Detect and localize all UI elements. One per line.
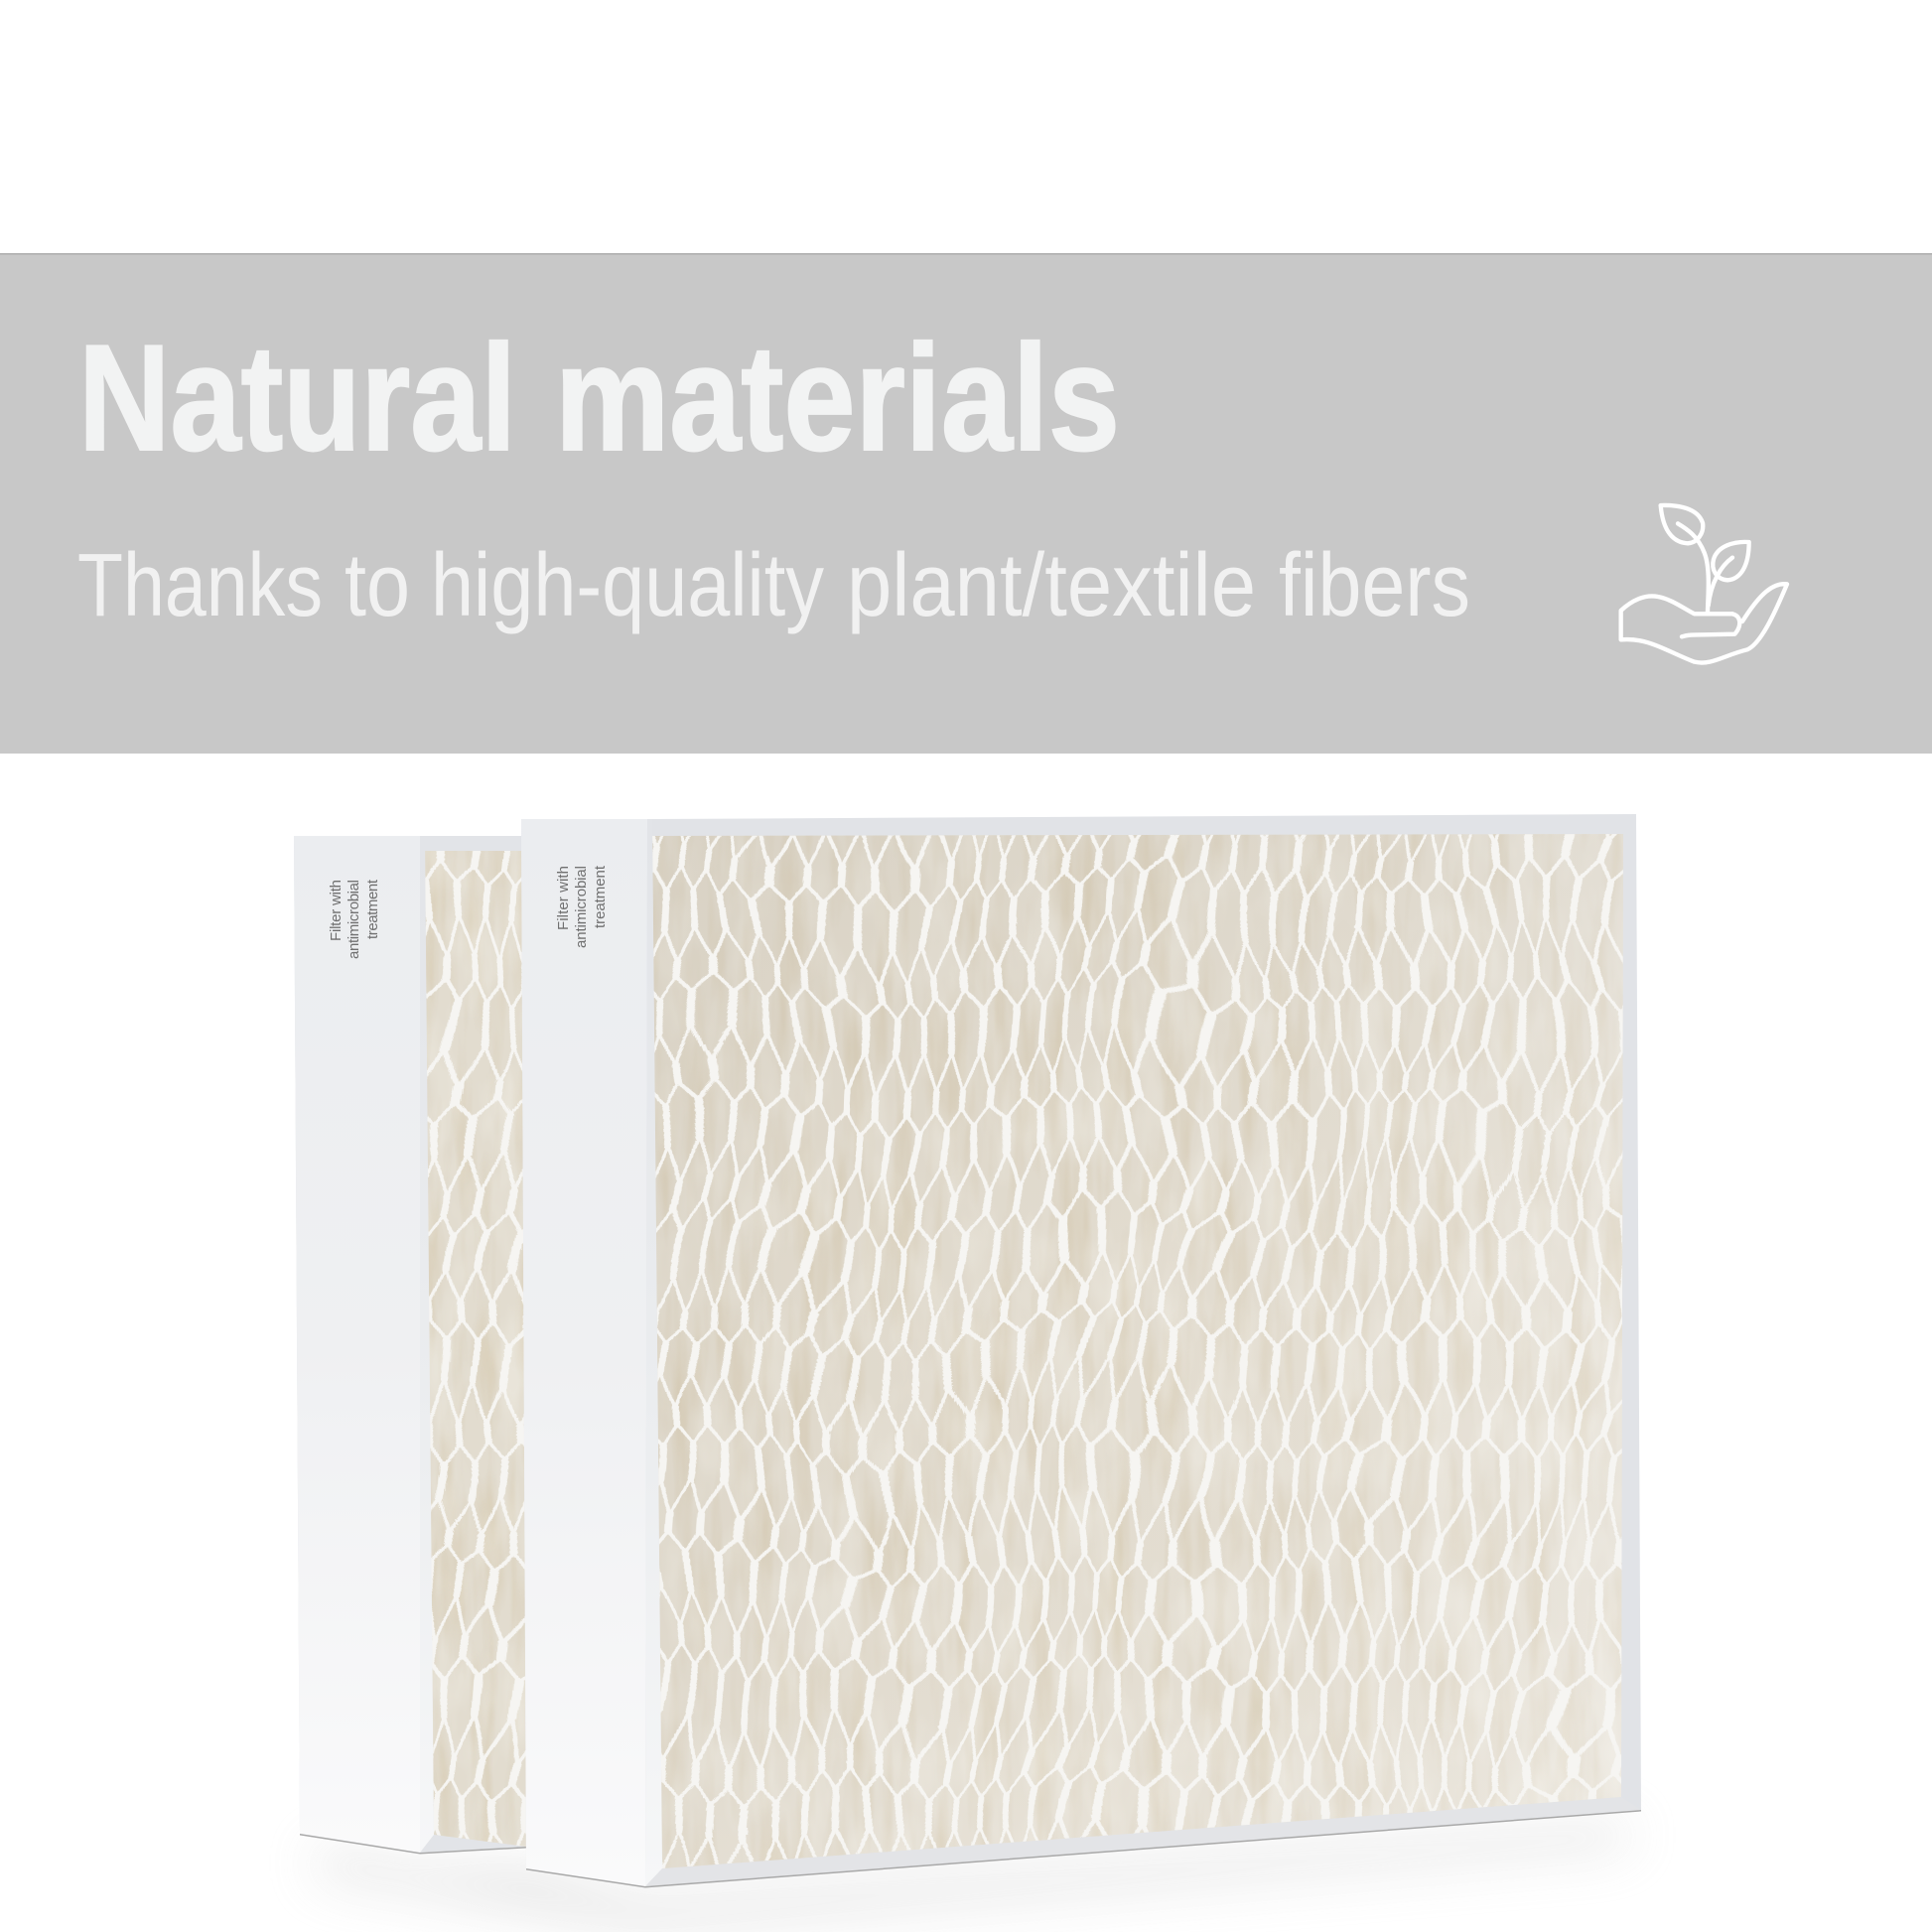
- icon: hand holding seedling: [1621, 505, 1787, 663]
- rear label text: treatment: [364, 879, 381, 939]
- rear filter: [294, 836, 526, 1855]
- rear filter frame: [294, 836, 526, 1853]
- subtitle: fibers: [1279, 536, 1470, 635]
- subtitle: high-quality: [431, 536, 824, 635]
- rear label text: antimicrobial: [345, 880, 362, 959]
- floor shadow: [318, 1822, 1628, 1931]
- rear filter mesh: [425, 851, 526, 1847]
- front label text: treatment: [592, 865, 609, 928]
- subtitle: to: [345, 536, 410, 635]
- rear label text: Filter with: [328, 880, 345, 941]
- front filter mesh: [652, 834, 1623, 1868]
- subtitle: Thanks: [77, 536, 323, 635]
- front label text: antimicrobial: [573, 866, 590, 948]
- subtitle: plant/textile: [847, 536, 1256, 635]
- heading band: [0, 253, 1932, 754]
- title: Natural: [78, 314, 516, 483]
- front label text: Filter with: [555, 866, 572, 930]
- front filter side panel: [521, 819, 647, 1886]
- title: materials: [555, 314, 1120, 483]
- rear filter side panel: [294, 836, 420, 1853]
- front filter: [521, 814, 1641, 1888]
- front label text: [555, 865, 609, 948]
- rear label text: [328, 879, 381, 959]
- front filter frame: [521, 814, 1641, 1886]
